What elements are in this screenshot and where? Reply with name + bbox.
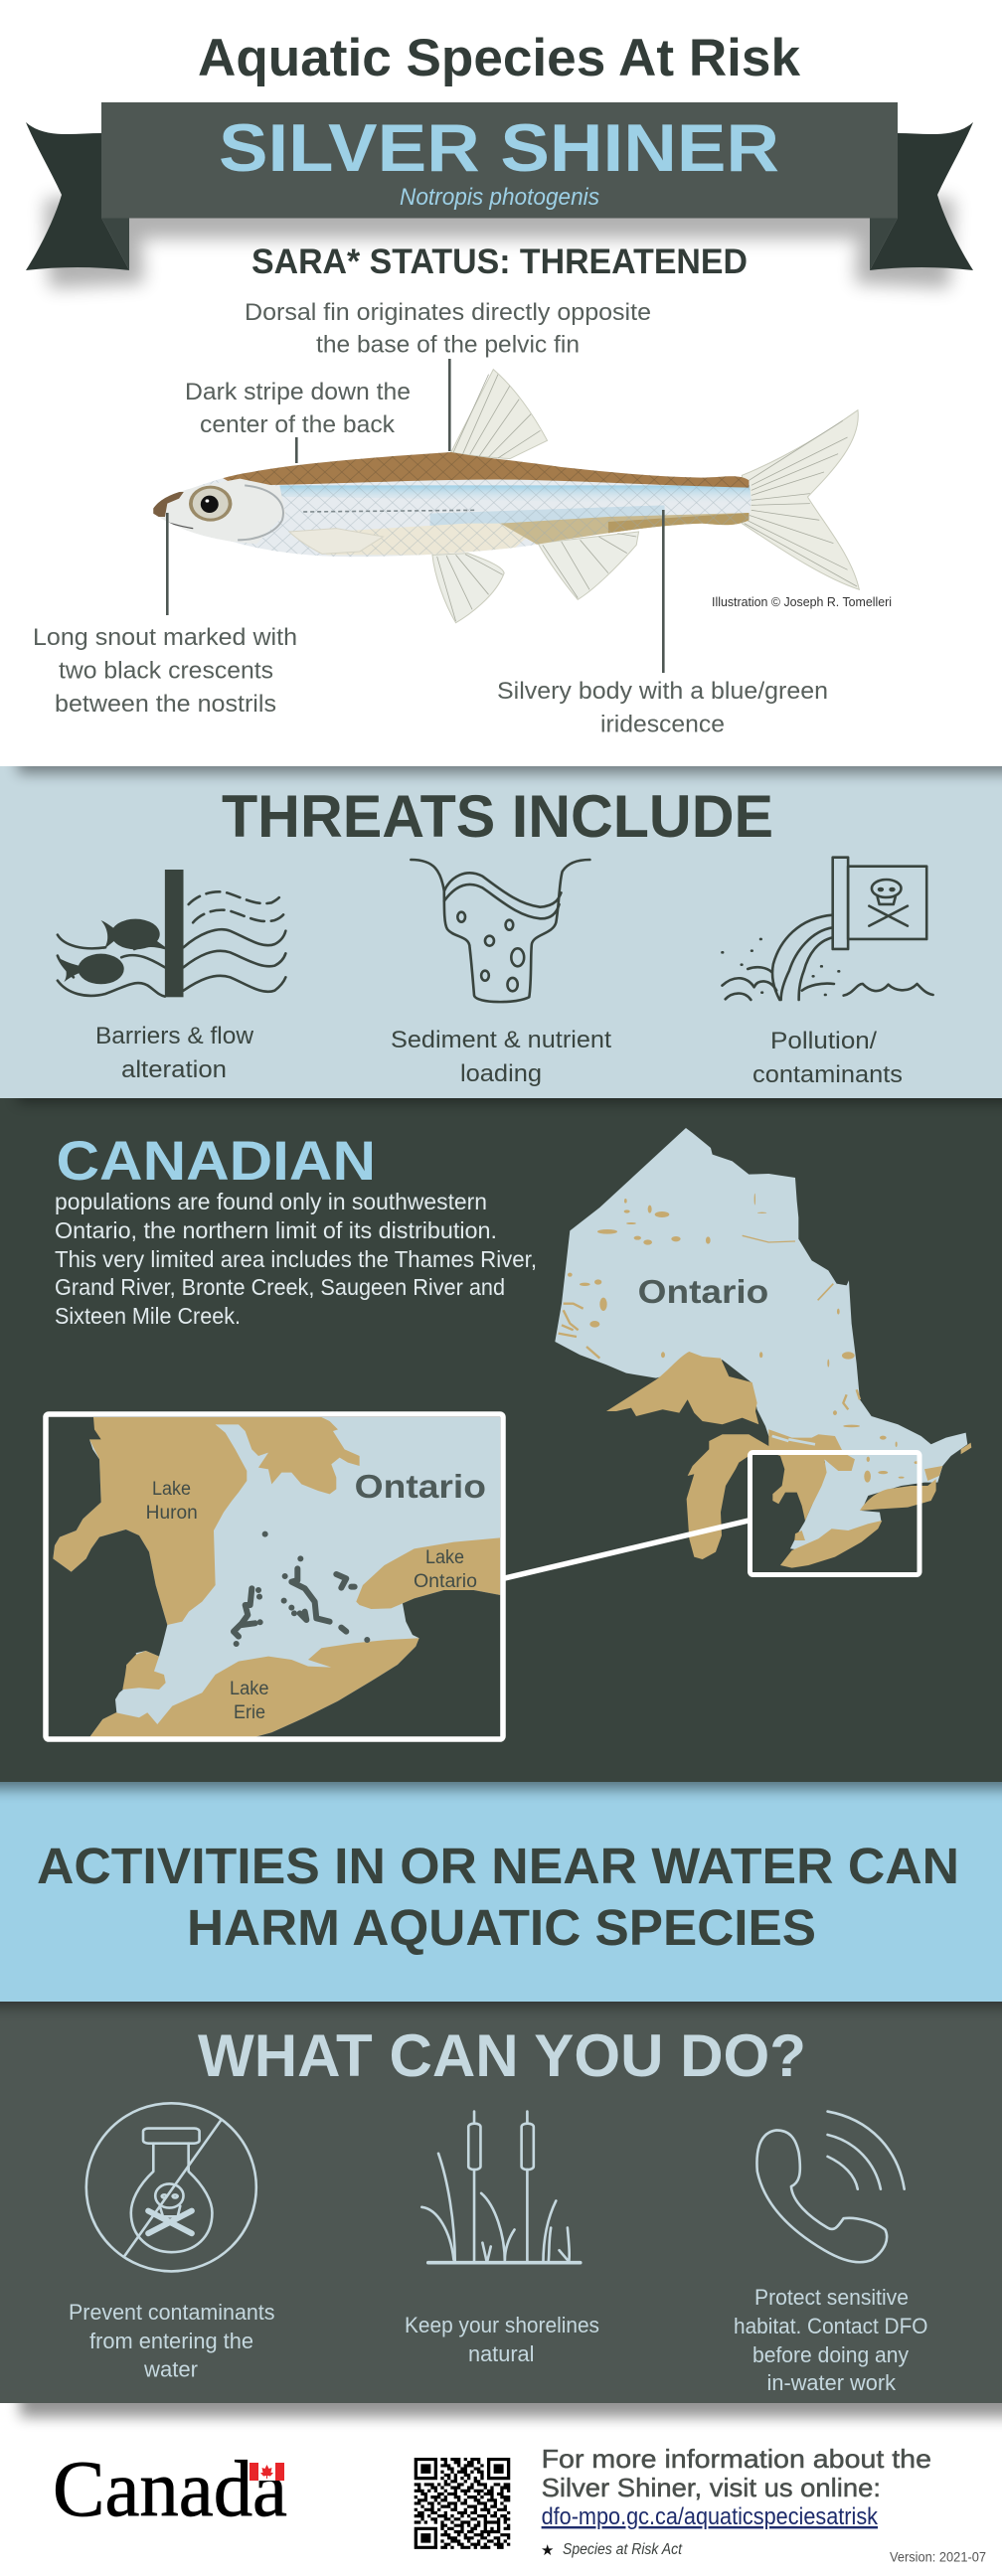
lake Superior <box>606 1352 758 1424</box>
message line two: HARM AQUATIC SPECIES <box>187 1899 816 1956</box>
callout: long snout: Long snout marked with <box>33 624 297 651</box>
fish body <box>153 452 752 557</box>
what can you do heading: WHAT CAN YOU DO? <box>198 2022 806 2089</box>
pectoral fin <box>289 529 383 554</box>
banner <box>101 102 898 219</box>
callout: silvery body: Silvery body with a blue/green <box>497 678 828 705</box>
footnote: Species at Risk Act: Species at Risk Act <box>563 2541 683 2558</box>
land <box>555 1128 967 1550</box>
caption: prevent contaminants: Prevent contaminants <box>69 2300 274 2325</box>
caption: protect habitat: in-water work <box>767 2370 897 2395</box>
panel: what can you do <box>0 1981 1002 2403</box>
distribution paragraph <box>55 1189 537 1329</box>
QR code <box>415 2458 510 2549</box>
threat caption: pollution: Pollution/ <box>770 1028 877 1054</box>
icon: telephone <box>756 2112 905 2262</box>
inset label: Lake Erie <box>230 1679 268 1723</box>
icon: Canadian flag <box>250 2463 284 2481</box>
dorsal fin <box>451 370 548 459</box>
inset lake Ontario <box>356 1537 500 1609</box>
inset dark US land west <box>49 1417 167 1737</box>
panel bottom shadow <box>20 2385 1002 2417</box>
fish eye <box>189 486 232 522</box>
locator box on main map <box>750 1453 919 1574</box>
lake Erie <box>780 1521 882 1568</box>
ribbon right tail <box>870 122 973 270</box>
inset label: Lake Ontario: Ontario <box>414 1571 477 1592</box>
threat caption: barriers: alteration <box>121 1056 227 1083</box>
icon: shoreline reeds <box>421 2112 581 2263</box>
callout: long snout <box>33 513 297 718</box>
callout: long snout: between the nostrils <box>55 691 276 718</box>
callout: dark stripe <box>185 379 411 463</box>
threat caption: pollution <box>752 1028 903 1088</box>
more information text <box>542 2444 931 2530</box>
website link: dfo-mpo.gc.ca/aquaticspeciesatrisk <box>542 2503 879 2530</box>
icon: sediment and nutrient <box>411 860 589 1002</box>
inset lake St. Clair <box>122 1651 166 1690</box>
inset label: Lake Ontario <box>414 1547 477 1592</box>
threat caption: barriers <box>95 1023 254 1083</box>
tail fin <box>742 410 859 589</box>
distribution paragraph: Ontario, the northern limit of its distribution. <box>55 1217 497 1243</box>
threats heading: THREATS INCLUDE <box>222 783 773 850</box>
header: title, banner and status <box>26 29 973 288</box>
inset map: southwestern Ontario <box>49 1417 500 1737</box>
caption: keep shorelines natural <box>405 2313 599 2366</box>
inset label: Lake Erie: Lake <box>230 1679 268 1699</box>
inset label: Lake Huron: Huron <box>146 1503 198 1524</box>
callout: long snout: two black crescents <box>59 658 273 684</box>
callout: dorsal fin: Dorsal fin originates directly opposite <box>245 299 651 326</box>
inset dark US land south-east <box>253 1590 500 1737</box>
inset label: Lake Erie: Erie <box>234 1702 265 1723</box>
threat caption: sediment: loading <box>460 1060 542 1087</box>
inset label: Ontario: Ontario <box>355 1468 486 1505</box>
callout: silvery body <box>497 510 828 737</box>
ribbon left tail <box>26 122 129 270</box>
ribbon shadow <box>45 189 954 288</box>
callout: dorsal fin <box>245 299 651 451</box>
river and west-side lakes <box>559 1235 860 1444</box>
canadian heading: CANADIAN <box>56 1129 376 1192</box>
icon: pollution pipe and flag <box>722 858 933 1000</box>
caption: keep shorelines natural: Keep your shorelines <box>405 2313 599 2337</box>
caption: protect habitat: habitat. Contact DFO <box>734 2314 928 2338</box>
caption: protect habitat: before doing any <box>752 2342 909 2367</box>
inset lake Erie <box>89 1638 419 1737</box>
icon: barriers and flow <box>58 870 285 997</box>
lake Huron <box>762 1429 855 1521</box>
inset frame <box>46 1414 503 1739</box>
fish illustration <box>139 370 859 623</box>
connector line <box>505 1521 749 1578</box>
version: Version: 2021-07 <box>890 2550 986 2564</box>
threat caption: barriers: Barriers & flow <box>95 1023 254 1049</box>
distribution paragraph: Sixteen Mile Creek. <box>55 1303 241 1329</box>
callout: dark stripe: Dark stripe down the <box>185 379 411 405</box>
SARA status: SARA* STATUS: THREATENED <box>251 242 748 281</box>
inland lakes <box>568 1194 971 1540</box>
caption: keep shorelines natural: natural <box>468 2341 535 2366</box>
illustration credit: Illustration © Joseph R. Tomelleri <box>712 595 892 609</box>
inset lake Huron and Georgian Bay <box>53 1417 360 1625</box>
caption: prevent contaminants <box>69 2300 274 2381</box>
ontario label: Ontario <box>638 1273 768 1310</box>
callout: dorsal fin: the base of the pelvic fin <box>316 332 580 358</box>
inset label: Lake Huron <box>146 1479 198 1524</box>
map: Ontario province <box>555 1128 971 1568</box>
panel: threats <box>0 745 1002 1098</box>
silver shiner occurrence dots <box>234 1534 367 1644</box>
title: Aquatic Species At Risk <box>198 29 801 87</box>
panel: canadian distribution <box>0 1078 1002 1782</box>
distribution paragraph: populations are found only in southwestern <box>55 1189 487 1214</box>
species name: SILVER SHINER <box>219 110 779 186</box>
callout: dark stripe: center of the back <box>200 411 396 438</box>
footnote: Species at Risk Act: ★ <box>541 2542 554 2559</box>
more information text: For more information about the <box>542 2444 931 2474</box>
threat caption: sediment <box>391 1027 611 1087</box>
caption: prevent contaminants: water <box>143 2357 198 2381</box>
callout: silvery body: iridescence <box>600 712 725 737</box>
inset label: Lake Ontario: Lake <box>425 1547 464 1568</box>
scientific name: Notropis photogenis <box>400 184 599 211</box>
threat caption: pollution: contaminants <box>752 1061 903 1088</box>
lake Michigan <box>687 1434 768 1559</box>
fish pair <box>58 919 165 984</box>
anal fin <box>432 554 504 623</box>
inset label: Lake Huron: Lake <box>152 1479 191 1500</box>
distribution paragraph: This very limited area includes the Thames River, <box>55 1246 537 1272</box>
caption: protect habitat: Protect sensitive <box>754 2285 909 2310</box>
logo: Canada wordmark: Canada <box>53 2446 287 2533</box>
caption: prevent contaminants: from entering the <box>89 2329 253 2353</box>
icon: no contaminants <box>86 2103 256 2271</box>
panel: activities message <box>0 1761 1002 2002</box>
lake Ontario <box>860 1479 936 1511</box>
distribution paragraph: Grand River, Bronte Creek, Saugeen River and <box>55 1274 505 1300</box>
message line one: ACTIVITIES IN OR NEAR WATER CAN <box>37 1838 959 1894</box>
caption: protect habitat <box>734 2285 928 2395</box>
threat caption: sediment: Sediment & nutrient <box>391 1027 611 1053</box>
pelvic fin <box>538 532 639 599</box>
more information text: Silver Shiner, visit us online: <box>542 2473 881 2502</box>
